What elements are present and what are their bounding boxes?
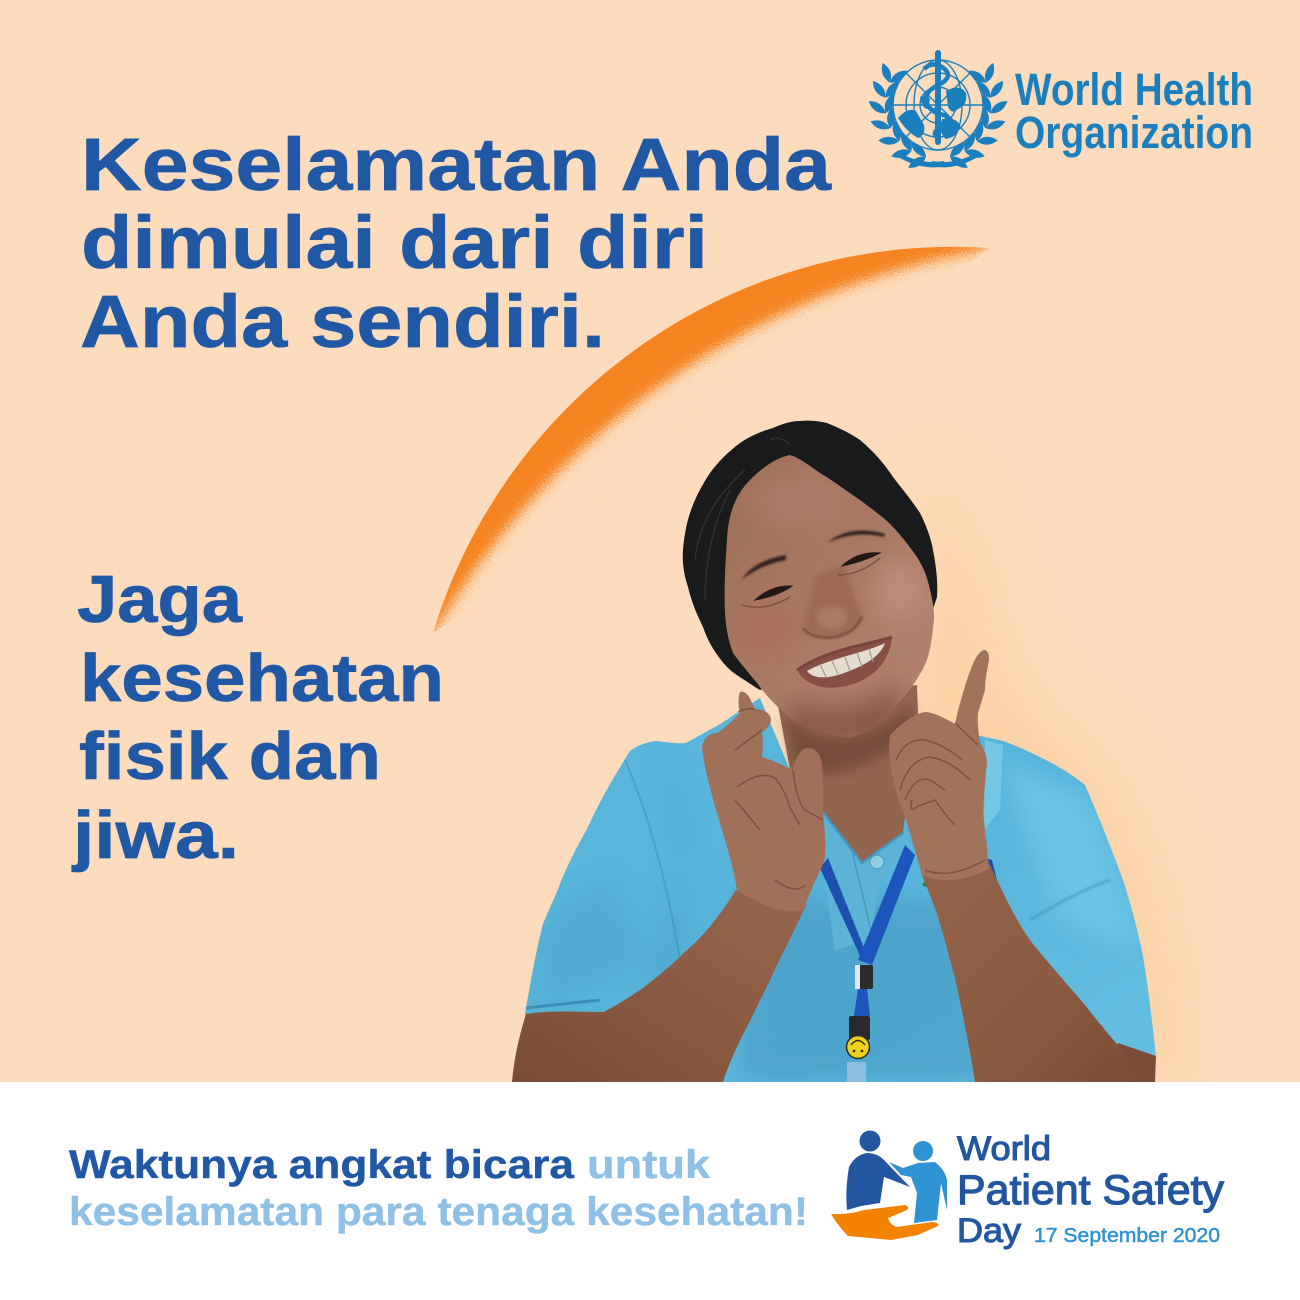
left hand finger lines xyxy=(735,709,823,889)
face xyxy=(724,455,934,737)
right arm xyxy=(922,865,1142,1082)
collar and placket xyxy=(826,890,878,950)
logo wordmark: World xyxy=(957,1130,1051,1168)
subheading: fisik dan xyxy=(79,719,381,794)
title: Anda sendiri. xyxy=(80,280,605,363)
footer slogan: untuk xyxy=(587,1143,711,1187)
title xyxy=(80,123,832,363)
right hand finger lines xyxy=(896,723,985,873)
subheading xyxy=(71,562,444,873)
World Patient Safety Day logo xyxy=(831,1130,1224,1250)
footer panel xyxy=(0,1082,1300,1300)
footer slogan: Waktunya angkat bicara xyxy=(69,1143,575,1187)
logo wordmark: 17 September 2020 xyxy=(1034,1224,1220,1247)
nose xyxy=(803,565,862,638)
footer slogan xyxy=(69,1143,808,1234)
WHO wordmark: World Health xyxy=(1015,64,1253,115)
icon: WHO emblem xyxy=(866,50,1010,171)
icon: two people and caring hand xyxy=(831,1130,947,1240)
right hand xyxy=(889,650,990,880)
subheading: Jaga xyxy=(77,562,243,637)
smiley badge xyxy=(847,1062,866,1082)
title: dimulai dari diri xyxy=(81,201,708,284)
photo: smiling health worker xyxy=(512,421,1160,1085)
WHO wordmark: Organization xyxy=(1015,107,1253,158)
photo halo xyxy=(900,470,1190,1082)
smile xyxy=(797,637,892,688)
arm behind shirt: lower right xyxy=(1110,1035,1156,1082)
logo wordmark: Day xyxy=(957,1212,1021,1250)
orange arc xyxy=(433,246,990,633)
lanyard xyxy=(820,845,915,1082)
WHO wordmark xyxy=(1015,64,1253,158)
shirt xyxy=(520,695,1160,1085)
title: Keselamatan Anda xyxy=(81,123,832,206)
WHO logo xyxy=(866,50,1253,171)
footer slogan: keselamatan para tenaga kesehatan! xyxy=(69,1190,808,1234)
left hand xyxy=(702,692,825,911)
eyebrows xyxy=(741,531,885,580)
logo wordmark xyxy=(957,1130,1224,1250)
eyes xyxy=(742,553,880,607)
subheading: kesehatan xyxy=(80,641,444,716)
subheading: jiwa. xyxy=(71,798,239,873)
logo wordmark: Patient Safety xyxy=(957,1166,1224,1213)
lanyard clip xyxy=(856,965,873,989)
hair xyxy=(683,421,937,690)
left arm xyxy=(512,890,806,1082)
neck xyxy=(777,685,918,863)
